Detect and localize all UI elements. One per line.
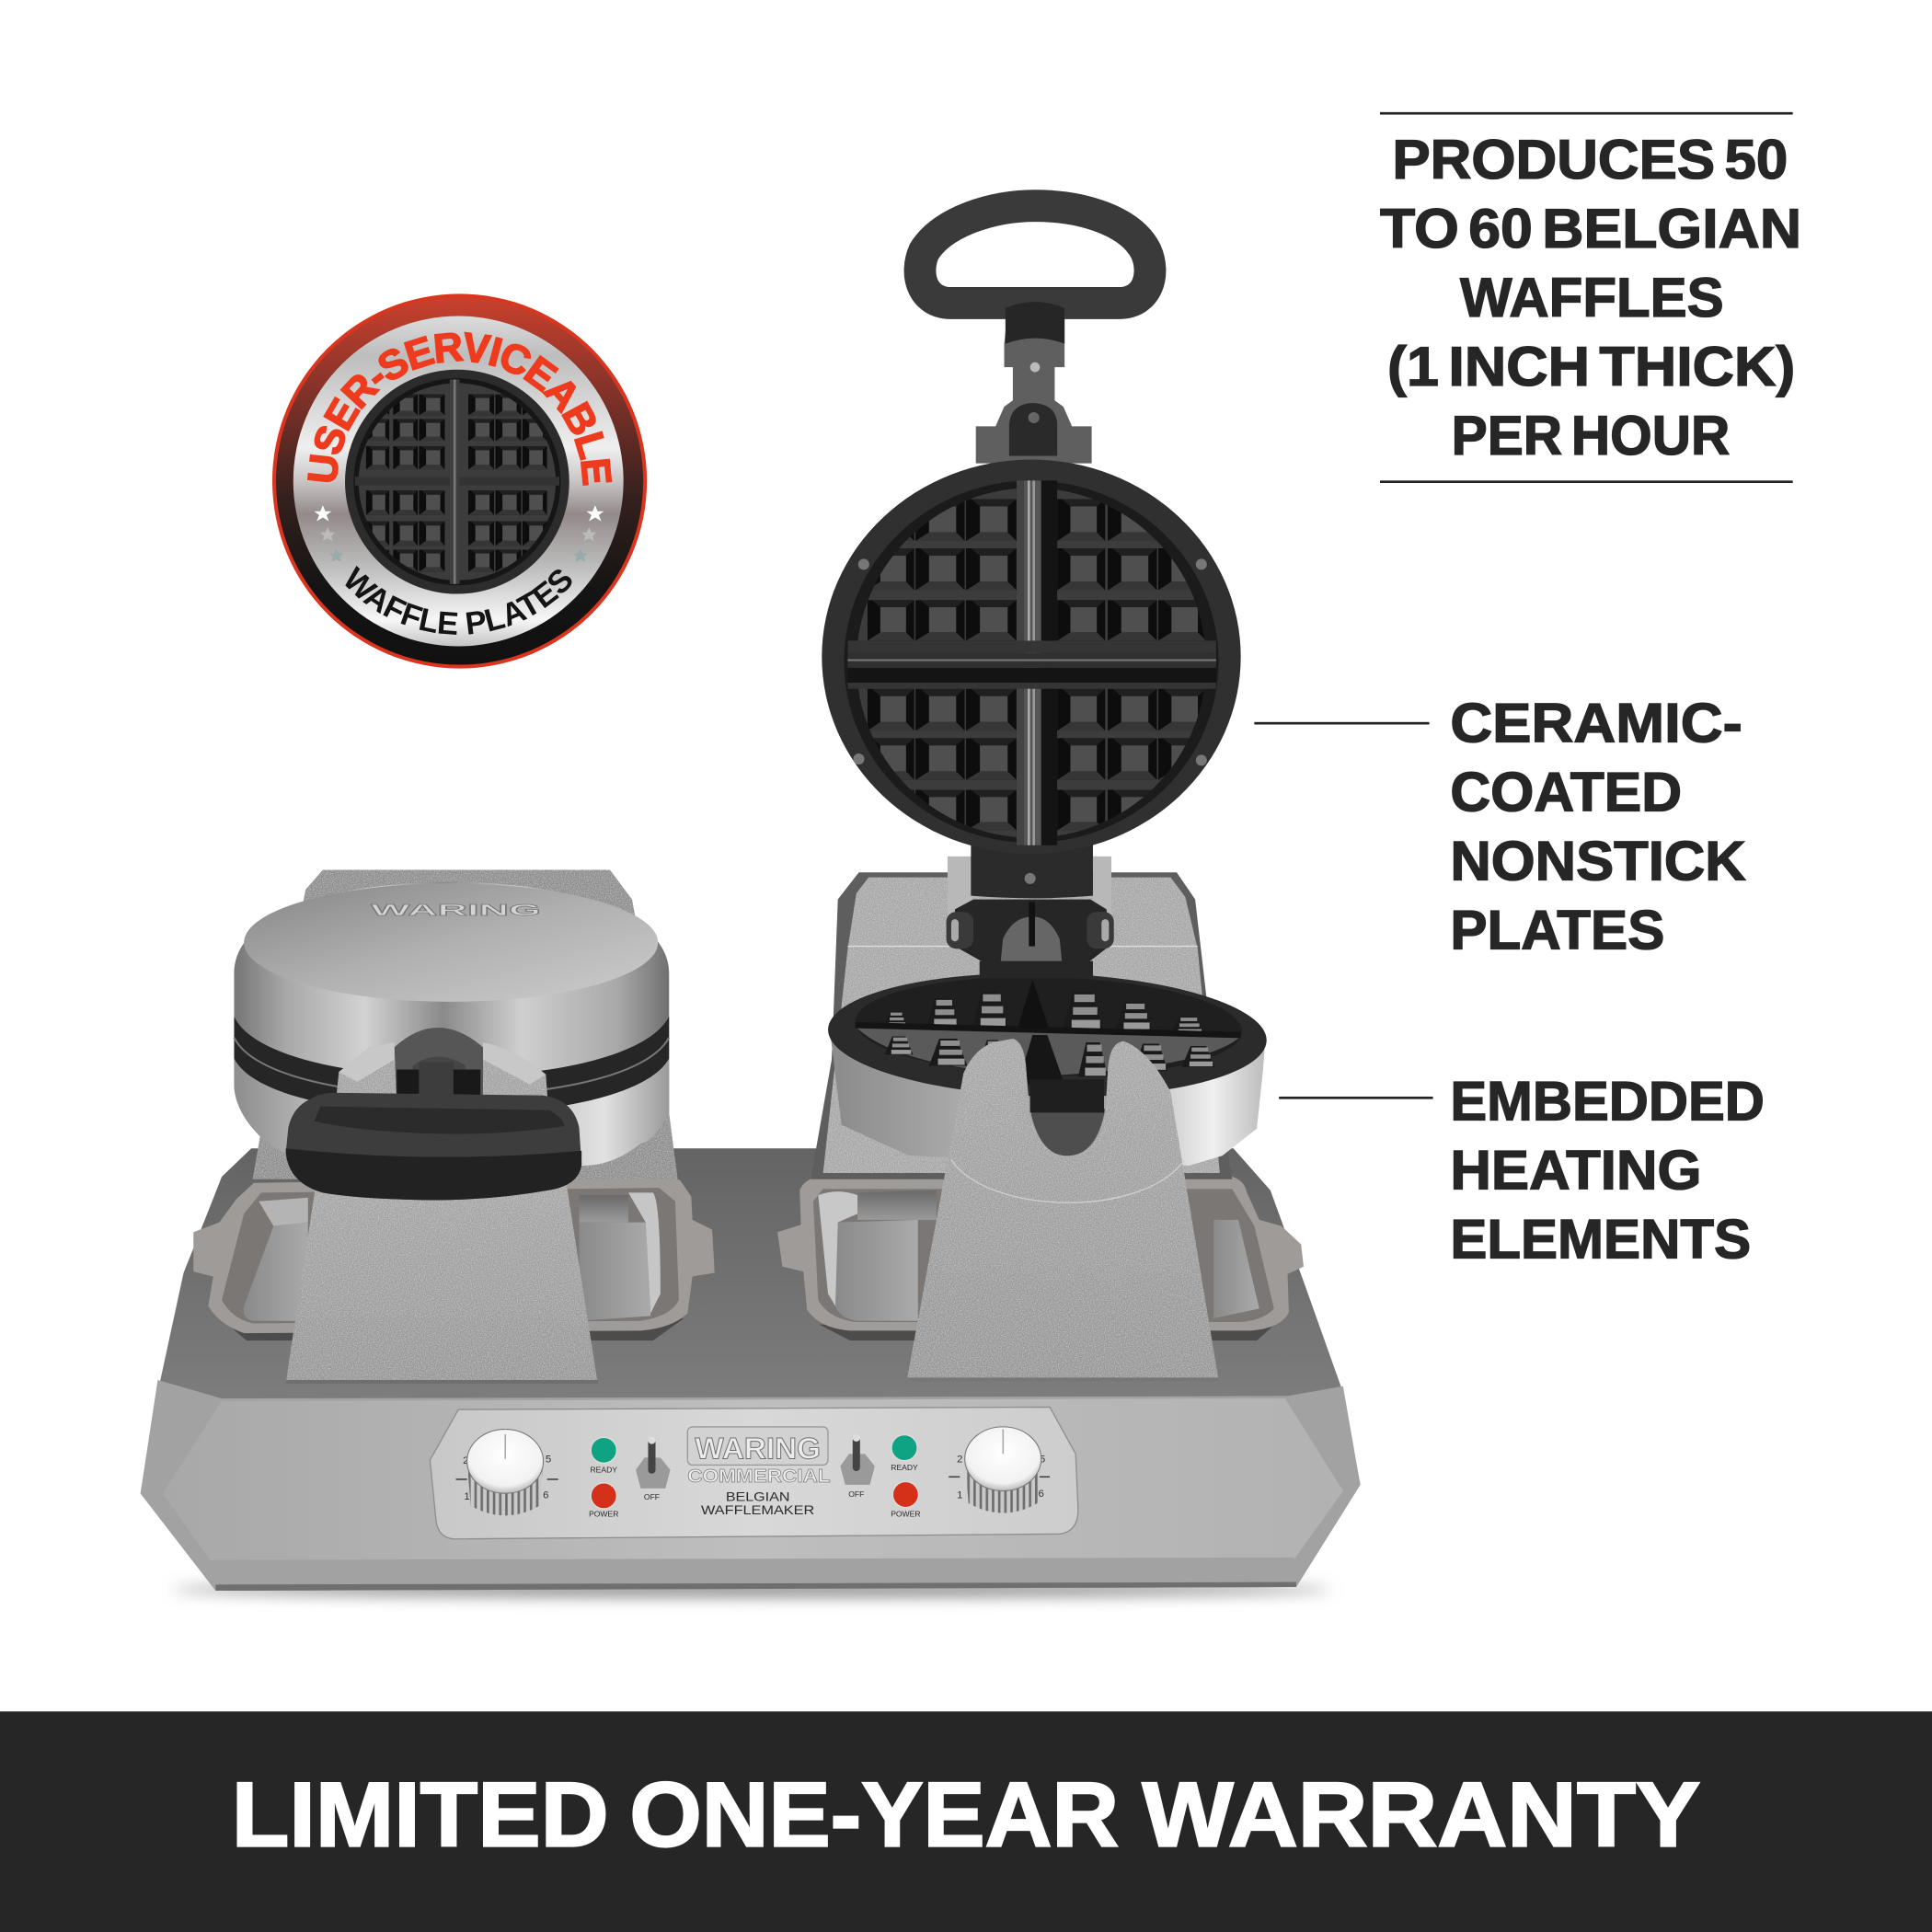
left dial: 6 (543, 1490, 548, 1501)
right lower open plate (826, 968, 1268, 1166)
left dial: 5 (546, 1455, 551, 1466)
right dial: 1 (957, 1490, 962, 1501)
indicator lights right: POWER (891, 1510, 921, 1519)
left closed waffle iron: WARING (371, 901, 541, 919)
toggle switch left: OFF (644, 1492, 660, 1501)
Waring Commercial logo (687, 1427, 831, 1517)
warranty banner (0, 1711, 1932, 1932)
callout: embedded heating elements: ELEMENTS (1450, 1207, 1751, 1270)
left closed waffle iron (234, 882, 669, 1166)
toggle switch left (636, 1437, 671, 1501)
open top waffle plate with handle (822, 206, 1241, 898)
warranty banner: LIMITED (232, 1764, 609, 1866)
indicator lights left: POWER (589, 1510, 618, 1519)
right front support (907, 1039, 1219, 1381)
callout: production rate: PRODUCES 50 (1392, 128, 1788, 190)
indicator lights right: READY (891, 1463, 918, 1472)
plate rim (971, 838, 1093, 898)
badge: user-serviceable waffle plates: WAFFLE PLATES (345, 565, 572, 635)
right hinge (947, 857, 1114, 978)
indicator lights left (589, 1437, 618, 1519)
drip tray left (193, 1177, 715, 1340)
right dial (949, 1427, 1050, 1513)
callout: production rate: (1 INCH THICK) (1387, 335, 1795, 397)
Waring Commercial logo: BELGIAN (726, 1489, 789, 1503)
left dial: 1 (464, 1491, 470, 1502)
callout: ceramic-coated nonstick plates: PLATES (1450, 898, 1664, 960)
right dial: 5 (1040, 1455, 1045, 1466)
control panel (430, 1407, 1078, 1539)
callout: production rate: TO 60 BELGIAN (1380, 197, 1801, 259)
toggle switch right: OFF (848, 1489, 864, 1499)
right dial: 6 (1039, 1489, 1044, 1500)
Waring Commercial logo: COMMERCIAL (687, 1466, 831, 1487)
callout: embedded heating elements: EMBEDDED (1450, 1069, 1765, 1132)
drop shadow (173, 1582, 1330, 1597)
drip tray right (777, 1177, 1304, 1340)
right dial: 2 (957, 1455, 962, 1466)
handle (920, 206, 1150, 303)
left dial (456, 1430, 558, 1515)
callout: production rate: PER HOUR (1452, 404, 1730, 466)
callout: ceramic-coated nonstick plates: CERAMIC- (1450, 691, 1742, 753)
badge: user-serviceable waffle plates: USER-SERVICEABLE (307, 331, 613, 486)
badge: user-serviceable waffle plates (272, 293, 648, 669)
base unit (141, 1148, 1361, 1591)
Waring Commercial logo: WAFFLEMAKER (701, 1502, 814, 1517)
left rear support (253, 870, 678, 1179)
right rear support (811, 872, 1232, 1179)
handle neck and bracket (976, 308, 1092, 464)
callout: embedded heating elements: HEATING (1450, 1138, 1702, 1201)
indicator lights right (891, 1435, 921, 1519)
warranty banner: WARRANTY (1143, 1764, 1700, 1866)
left dial: 2 (463, 1455, 468, 1466)
callout: ceramic-coated nonstick plates: COATED (1450, 760, 1682, 822)
callout: production rate: WAFFLES (1460, 266, 1724, 328)
waffle maker product (141, 206, 1361, 1597)
warranty banner: ONE-YEAR (629, 1764, 1119, 1866)
callout: production rate (1380, 112, 1801, 483)
callout: embedded heating elements (1279, 1069, 1765, 1270)
indicator lights left: READY (590, 1465, 617, 1474)
toggle switch right (840, 1434, 875, 1499)
Waring Commercial logo: WARING (695, 1432, 821, 1466)
callout: ceramic-coated nonstick plates (1254, 691, 1746, 960)
left front support with handle (286, 1028, 598, 1384)
callout: ceramic-coated nonstick plates: NONSTICK (1450, 829, 1746, 891)
